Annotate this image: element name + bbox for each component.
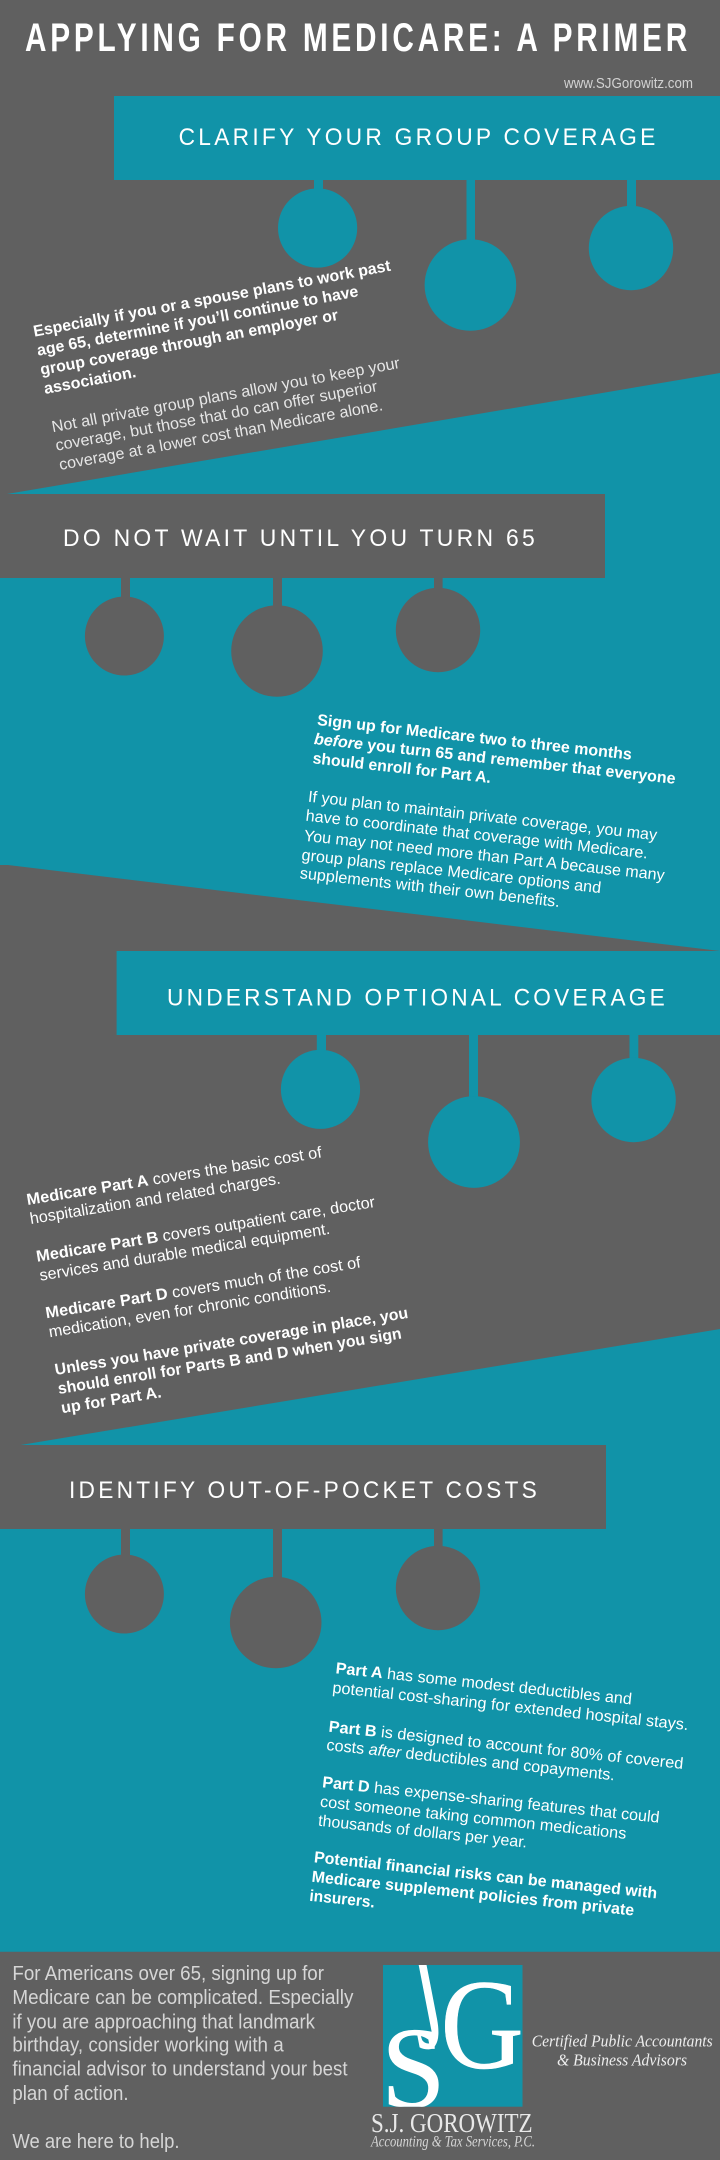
tagline: & Business Advisors [557,2051,687,2070]
text block: financial risks: insurers. [309,1888,376,1912]
logo: S.J. Gorowitz: J [394,1925,457,2079]
text block: coordinating coverage: supplements with their own benefits. [299,865,561,911]
heading band: CLARIFY YOUR GROUP COVERAGE [179,124,659,151]
text block: medicare part d: medication, even for chronic conditions. [48,1279,332,1341]
closing text: plan of action. [12,2082,129,2105]
text block: part d costs [317,1774,660,1852]
text block: enrollment advice: should enroll for Parts B and D when you sign [57,1326,403,1398]
icon: hanging circle 2 [428,1035,520,1188]
text block: lead statement [32,258,393,398]
icon: hanging circle 2 [231,578,323,697]
text block: part b costs: Part B is designed to account for 80% of covered [328,1719,684,1773]
panel: do not wait until you turn 65 [0,373,720,951]
text block: medicare part d: Medicare Part D covers much of the cost of [44,1254,362,1322]
logo: S.J. Gorowitz: Accounting & Tax Services, P.C. [370,2134,535,2151]
panel: understand optional coverage [25,951,720,1417]
closing text: Medicare can be complicated. Especially [12,1986,354,2009]
icon: hanging circle 1 [278,180,357,268]
text block: lead statement: association. [43,364,138,398]
text block: enrollment advice [54,1305,409,1417]
heading band [114,96,720,180]
tagline [532,2032,713,2070]
text block: private group plans: Not all private group plans allow you to keep your [50,355,402,436]
heading band: UNDERSTAND OPTIONAL COVERAGE [167,985,668,1012]
text block: sign up timing: should enroll for Part A. [312,750,492,787]
text block: coordinating coverage: have to coordinate that coverage with Medicare. [305,808,649,862]
panel: clarify your group coverage [32,96,720,474]
text block: coordinating coverage: group plans replace Medicare options and [301,847,602,897]
text block: coordinating coverage: If you plan to maintain private coverage, you may [307,789,658,844]
text block: part d costs: thousands of dollars per year. [317,1813,528,1852]
icon: hanging circle 1 [281,1035,360,1129]
text block: medicare part a: hospitalization and related charges. [29,1171,282,1228]
panel: footer message [12,1965,712,2152]
text block: part b costs: costs after deductibles and copayments. [326,1737,616,1784]
teal section background [0,373,720,951]
text block: coordinating coverage: You may not need more than Part A because many [303,828,665,884]
closing text: We are here to help. [12,2130,180,2153]
logo: S.J. Gorowitz [370,1965,534,2150]
text block: part d costs: cost someone taking common medications [319,1794,627,1843]
icon: hanging circle 3 [591,1035,676,1142]
icon: hanging circle 2 [230,1529,322,1668]
tagline: Certified Public Accountants [532,2032,713,2051]
text block: medicare part a: Medicare Part A covers the basic cost of [25,1144,324,1209]
closing text: For Americans over 65, signing up for [12,1962,324,1985]
text block: sign up timing: before you turn 65 and remember that everyone [313,731,677,788]
icon: hanging circle 2 [425,180,516,331]
text block: sign up timing: Sign up for Medicare two to three months [316,712,633,764]
icon: hanging circle 3 [396,578,480,672]
text block: part d costs: Part D has expense-sharing features that could [321,1774,660,1827]
closing text: birthday, consider working with a [12,2034,284,2057]
text block: part a costs: potential cost-sharing for extended hospital stays. [332,1680,689,1734]
heading band [117,951,720,1035]
text block: lead statement: group coverage through an employer or [39,307,340,379]
text block: enrollment advice: Unless you have private coverage in place, you [54,1305,409,1379]
text block: medicare part b: services and durable medical equipment. [38,1221,331,1285]
closing text: if you are approaching that landmark [12,2010,316,2033]
text block: lead statement: Especially if you or a spouse plans to work past [32,258,393,341]
text block: financial risks: Potential financial risks can be managed with [313,1849,658,1902]
closing text: financial advisor to understand your best [12,2058,348,2081]
text block: private group plans: coverage, but those that do can offer superior [54,378,379,455]
text block: private group plans [50,355,402,474]
icon: hanging circle 3 [396,1529,480,1630]
text block: part a costs: Part A has some modest deductibles and [335,1660,633,1708]
logo: S.J. Gorowitz: S.J. GOROWITZ [371,2108,533,2138]
text block: coordinating coverage [299,789,665,911]
logo: S.J. Gorowitz: S [381,2005,445,2132]
panel: identify out-of-pocket costs [0,1329,720,1952]
heading band [0,1445,606,1529]
text block: enrollment advice: up for Part A. [60,1384,163,1417]
text block: financial risks: Medicare supplement policies from private [311,1869,635,1920]
heading band [0,494,605,578]
text block: lead statement: age 65, determine if you’ll continue to have [36,283,360,360]
heading band: IDENTIFY OUT-OF-POCKET COSTS [69,1477,540,1504]
icon: hanging circle 1 [85,1529,164,1634]
icon: hanging circle 3 [589,180,673,290]
heading band: DO NOT WAIT UNTIL YOU TURN 65 [63,525,538,552]
text block: medicare part b: Medicare Part B covers outpatient care, doctor [35,1194,377,1266]
teal section background [0,1329,720,1952]
logo: S.J. Gorowitz: G [440,1954,524,2096]
text block: private group plans: coverage at a lower cost than Medicare alone. [58,397,384,474]
closing text [12,1962,354,2153]
icon: hanging circle 1 [85,578,164,676]
website url: www.SJGorowitz.com [563,76,693,92]
